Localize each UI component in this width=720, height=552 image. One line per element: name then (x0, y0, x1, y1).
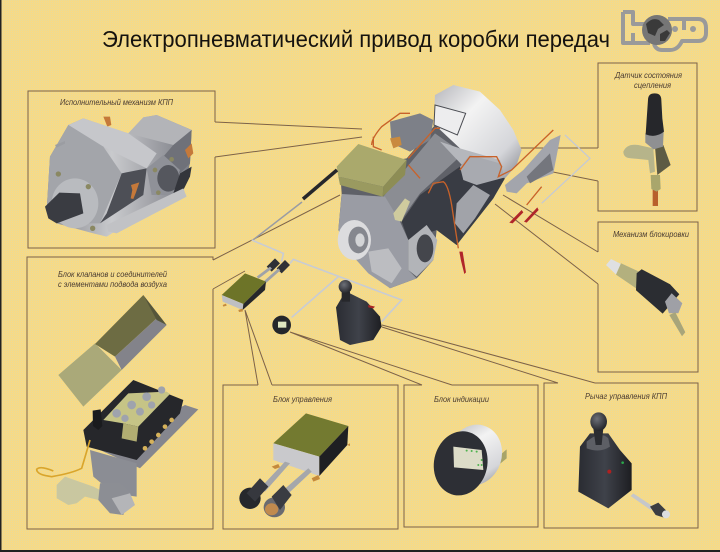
connector lines from panels to the assembly (213, 122, 598, 385)
panel heading: Датчик состояния (614, 71, 683, 80)
panel heading: Блок управления (273, 395, 333, 404)
panel heading line 2: сцепления (634, 81, 672, 90)
silver air pipe (542, 135, 590, 203)
panel heading line 2: с элементами подвода воздуха (58, 280, 167, 289)
panel: Механизм блокировки (598, 222, 698, 372)
panel: Исполнительный механизм КПП (28, 91, 215, 248)
illustration: gear lever (578, 412, 670, 518)
illustration: indicator (428, 418, 510, 500)
orange pipes (372, 113, 553, 248)
panel heading: Исполнительный механизм КПП (60, 98, 173, 107)
white plate (434, 105, 466, 135)
wiring to control unit and lever (252, 240, 402, 322)
panel: Датчик состояния сцепления (598, 63, 697, 211)
red connectors (459, 207, 539, 274)
illustration: valve block (37, 295, 198, 515)
illustration: control unit (239, 413, 350, 517)
panel: Блок клапанов и соединителей (27, 257, 213, 529)
side cover (408, 225, 437, 277)
panel: Рычаг управления КПП (544, 383, 698, 528)
panel: Блок индикации (404, 385, 538, 527)
illustration: clutch sensor (623, 93, 671, 206)
fork (393, 198, 410, 222)
panel heading: Механизм блокировки (613, 230, 690, 239)
panel heading: Блок клапанов и соединителей (58, 270, 167, 279)
clutch housing (433, 85, 522, 178)
panel heading: Блок индикации (434, 395, 490, 404)
front housing (338, 194, 417, 288)
small control unit (222, 267, 280, 312)
title: Электропневматический привод коробки передач (102, 26, 610, 52)
valve block (505, 135, 561, 193)
panel: Блок управления (223, 385, 398, 529)
cable and dark rod to olive box (253, 170, 337, 240)
upper mechanism surface (383, 133, 463, 222)
gearbox backing silhouette (338, 125, 505, 288)
illustration: actuator (45, 115, 193, 237)
illustration: lock mechanism (606, 259, 685, 336)
central gearbox assembly (337, 85, 590, 288)
logo: Кора (623, 12, 706, 50)
actuator on gearbox (390, 113, 433, 152)
panel heading: Рычаг управления КПП (585, 392, 667, 401)
small indicator (272, 316, 291, 334)
olive control box (337, 144, 407, 187)
small gear lever (336, 280, 382, 345)
dark gearbox body (402, 167, 505, 245)
